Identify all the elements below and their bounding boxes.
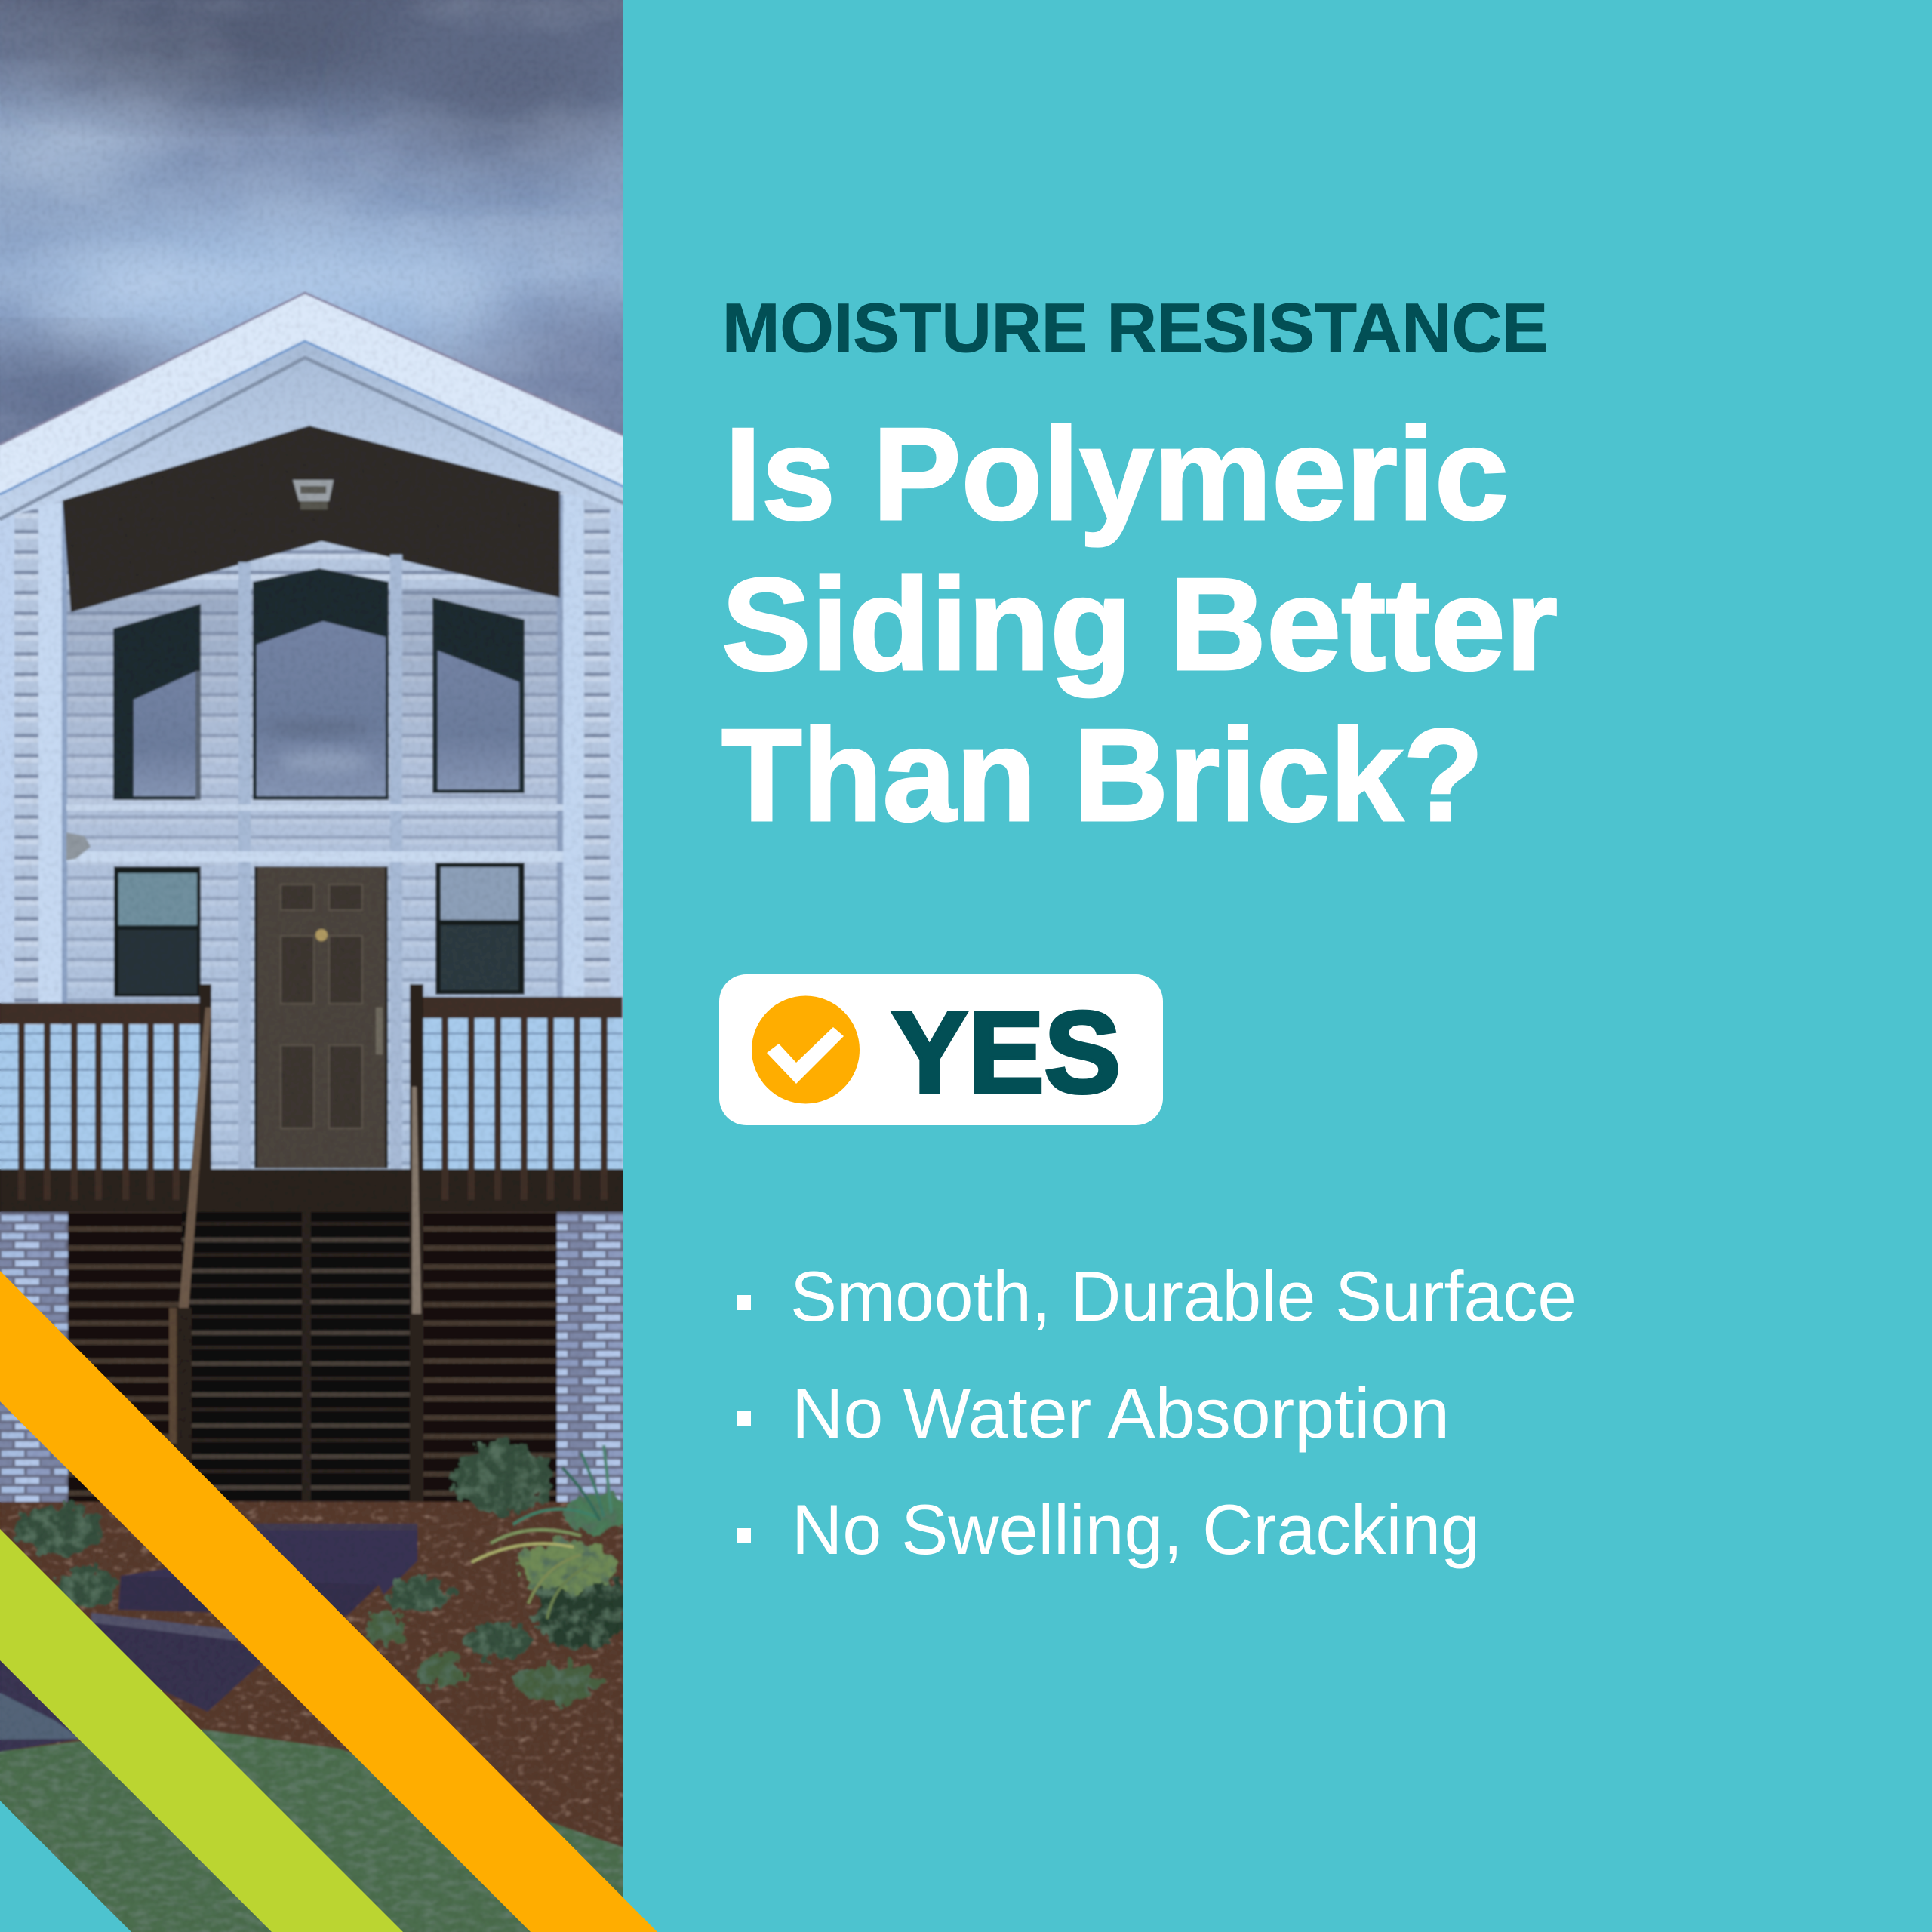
YES badge: [719, 974, 1163, 1125]
diagonal stripe: orange: [0, 1271, 657, 1932]
dark gable ceiling: [63, 426, 560, 612]
left railing: [0, 984, 211, 1211]
YES label: YES: [891, 988, 1121, 1117]
photo base: [0, 0, 649, 1932]
front door: [254, 866, 388, 1168]
background panel: [623, 0, 1932, 1932]
diagonal stripe: teal corner: [0, 1801, 131, 1932]
right railing: [410, 984, 623, 1512]
deck band: [0, 1169, 649, 1212]
stair handrails: [169, 1008, 421, 1481]
bullet: No Water Absorption: No Water Absorption: [792, 1374, 1450, 1453]
bullet: No Swelling, Cracking: No Swelling, Cracking: [792, 1490, 1480, 1569]
siding behind right railing: [423, 1018, 623, 1169]
palm plant: [472, 1445, 628, 1649]
icon: orange check circle: [752, 996, 860, 1103]
siding behind left railing: [0, 1025, 199, 1170]
upper window center: [253, 568, 389, 800]
lawn: [0, 1730, 649, 1932]
bullet: Smooth, Durable Surface: Smooth, Durable Surface: [790, 1257, 1577, 1336]
main title: [721, 400, 1558, 848]
brick foundation: [0, 1209, 649, 1514]
lower window left: [114, 866, 201, 997]
ground mulch: [0, 1502, 649, 1932]
gable lamp: [293, 480, 334, 509]
side lamp: [66, 832, 91, 860]
diagonal stripe: lime: [0, 1529, 403, 1932]
main title: Is Polymeric: [724, 400, 1509, 547]
photo: house under stormy sky: [0, 0, 649, 1932]
house wall and siding: [0, 483, 649, 1208]
photo grain: [0, 0, 649, 1932]
vertical and horizontal trim: [66, 555, 563, 1174]
main title: Than Brick?: [721, 701, 1484, 848]
front steps: [0, 1524, 417, 1752]
landscaping shrubs: [14, 1441, 599, 1703]
upper window right: [432, 598, 525, 793]
roof fascia: [0, 293, 649, 519]
roof soffit: [0, 341, 649, 521]
foundation lattice: [68, 1209, 557, 1514]
lower window right: [435, 863, 525, 995]
sky with clouds: [0, 0, 623, 447]
upper window left: [113, 604, 201, 800]
eyebrow heading: MOISTURE RESISTANCE: [722, 290, 1548, 367]
main title: Siding Better: [721, 550, 1558, 697]
bullet list: [737, 1257, 1577, 1569]
